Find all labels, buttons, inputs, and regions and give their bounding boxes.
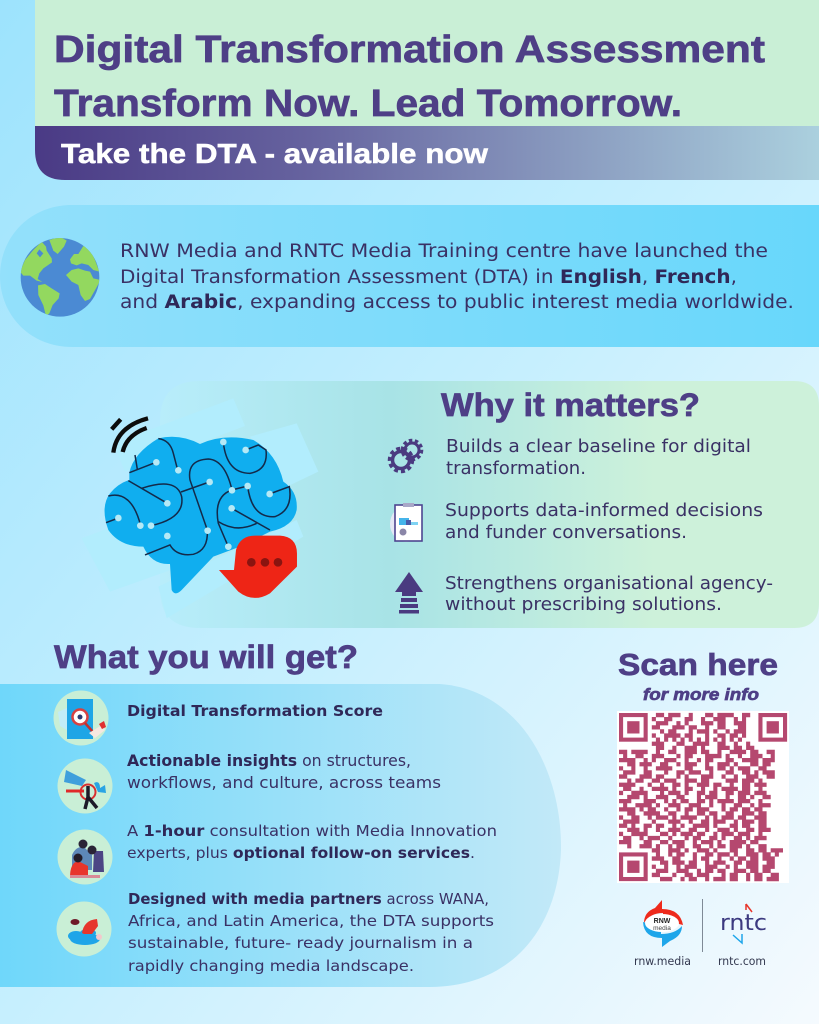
icon: clipboard <box>390 503 422 542</box>
text: decisions <box>445 501 763 543</box>
icon: gears <box>390 440 422 472</box>
intro text <box>120 241 794 313</box>
icon: megaphone <box>58 758 112 814</box>
text: decisions: and funder conversations. <box>445 523 687 543</box>
title: Digital Transformation Assessment <box>54 29 765 71</box>
heading: what you will get: What you will get? <box>54 639 358 675</box>
text: consultation <box>127 822 497 862</box>
text: baseline <box>446 437 751 479</box>
subheading: for more info: for more info <box>643 685 759 704</box>
icon: consultation team <box>58 830 112 884</box>
title <box>54 29 765 125</box>
pale background shapes <box>82 398 318 618</box>
panel: intro banner <box>0 205 819 347</box>
icon: up arrow <box>395 572 423 614</box>
subtitle bar <box>35 126 819 180</box>
logo: rntc <box>720 904 767 943</box>
text: baseline: transformation. <box>446 459 586 479</box>
header panel <box>35 0 819 180</box>
logo: RNW Media <box>643 900 683 947</box>
text: actionable insights: Actionable insights on structures, <box>127 751 411 770</box>
text: media partners: sustainable, future- ready journalism in a <box>128 934 473 952</box>
heading: scan here: Scan here <box>618 647 778 682</box>
circuit lines <box>106 439 290 555</box>
icon: score report <box>54 690 108 746</box>
text: media partners: Africa, and Latin America, the DTA supports <box>128 912 494 930</box>
icon: red speech bubble <box>219 536 297 598</box>
intro text: and Arabic , expanding access to public interest media worldwide. <box>120 292 794 313</box>
logo: RNW Media: media <box>653 925 671 932</box>
text: consultation: experts, plus optional follow-on services. <box>127 844 475 862</box>
divider <box>702 899 703 952</box>
title: Transform Now. Lead Tomorrow. <box>54 83 682 125</box>
text: score: Digital Transformation Score <box>127 702 383 720</box>
text: actionable insights <box>127 751 441 792</box>
caption: rntc.com: rntc.com <box>718 954 766 968</box>
intro text: Digital Transformation Assessment (DTA) in English , French , <box>120 267 737 288</box>
brain shape <box>105 437 297 593</box>
header green block <box>35 0 819 127</box>
circuit nodes <box>115 439 273 550</box>
text: actionable insights: workflows, and culture, across teams <box>127 773 441 792</box>
panel: why it matters <box>82 381 819 628</box>
panel: what you will get <box>0 684 561 987</box>
text: consultation: A 1-hour consultation with Media Innovation <box>127 822 497 840</box>
QR code <box>617 711 789 883</box>
text: baseline: Builds a clear baseline for digital <box>446 437 751 457</box>
text: media partners: rapidly changing media landscape. <box>128 957 414 975</box>
text: agency <box>445 574 773 615</box>
icon: globe <box>20 237 101 317</box>
text: media partners: Designed with media partners across WANA, <box>128 890 489 908</box>
icon: media partners map <box>56 902 112 956</box>
text: agency: without prescribing solutions. <box>445 595 722 615</box>
subtitle: Take the DTA - available now <box>61 138 488 169</box>
text: decisions: Supports data-informed decisions <box>445 501 763 521</box>
logo: rntc: rntc <box>720 911 767 936</box>
text: media partners <box>128 890 494 975</box>
illustration: brain with speech bubble <box>82 398 318 618</box>
caption: rnw.media: rnw.media <box>634 954 691 968</box>
intro text: RNW Media and RNTC Media Training centre have launched the <box>120 241 768 262</box>
logo: RNW Media: RNW <box>654 918 671 925</box>
heading: why it matters: Why it matters? <box>441 387 700 423</box>
icon: signal arcs <box>112 418 148 453</box>
text: agency: Strengthens organisational agency- <box>445 574 773 594</box>
